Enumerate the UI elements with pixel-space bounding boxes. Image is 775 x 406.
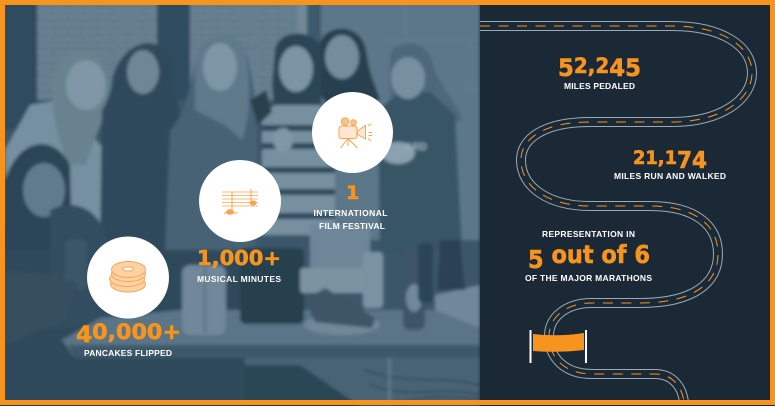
- stat: miles pedaled: 2,2: [574, 54, 609, 78]
- girl 6: [318, 28, 381, 103]
- icon circle: music notes: [199, 160, 281, 242]
- stat: film festival: 1: [346, 182, 359, 204]
- panel: team photo with blue duotone: [0, 0, 480, 406]
- stat: major marathons: REPRESENTATION IN: [542, 229, 635, 239]
- stat: major marathons: [525, 229, 652, 283]
- girl 3: [100, 43, 180, 250]
- stat: pancakes flipped: 0,000+: [92, 320, 181, 344]
- stat: pancakes flipped: [76, 320, 181, 358]
- girl 4: [164, 64, 256, 251]
- winding road illustration: [480, 26, 752, 402]
- stat: miles run and walked: [614, 147, 726, 181]
- stat: musical minutes: 1,000+: [197, 246, 281, 270]
- table: [62, 310, 480, 358]
- girl 7: [390, 44, 461, 122]
- stat: major marathons: out of 6: [544, 240, 650, 269]
- panel: dark road section: [480, 0, 775, 406]
- stat: pancakes flipped: 4: [76, 323, 92, 348]
- girl 2 body: [5, 100, 104, 224]
- stat: miles pedaled: 45: [609, 54, 641, 82]
- stat: miles pedaled: MILES PEDALED: [564, 81, 635, 91]
- finish line banner: [530, 330, 587, 363]
- stat: miles pedaled: 5: [558, 54, 574, 82]
- stat: miles run and walked: 74: [677, 148, 707, 174]
- stat: miles run and walked: MILES RUN AND WALKED: [614, 171, 726, 181]
- stat: film festival: INTERNATIONAL: [314, 208, 388, 218]
- stat: major marathons: 5: [528, 245, 544, 274]
- stat: pancakes flipped: PANCAKES FLIPPED: [84, 348, 172, 358]
- girl 1: [5, 144, 72, 250]
- stat: major marathons: OF THE MAJOR MARATHONS: [525, 273, 652, 283]
- stat: film festival: FILM FESTIVAL: [319, 221, 385, 231]
- panel: team photo with blue duotone: ARD: [405, 142, 427, 153]
- girl 2 face: [66, 60, 106, 110]
- stat: musical minutes: [197, 246, 281, 284]
- lower dark area: [0, 225, 250, 406]
- icon circle: film camera: [312, 92, 393, 173]
- stat: miles pedaled: [558, 54, 641, 91]
- hand and bottle: [66, 242, 86, 288]
- girl 5: [272, 34, 322, 115]
- icon circle: pancakes: [87, 236, 169, 318]
- stat: film festival: [314, 182, 388, 231]
- stat: miles run and walked: 21,1: [633, 147, 677, 169]
- stat: musical minutes: MUSICAL MINUTES: [197, 274, 281, 284]
